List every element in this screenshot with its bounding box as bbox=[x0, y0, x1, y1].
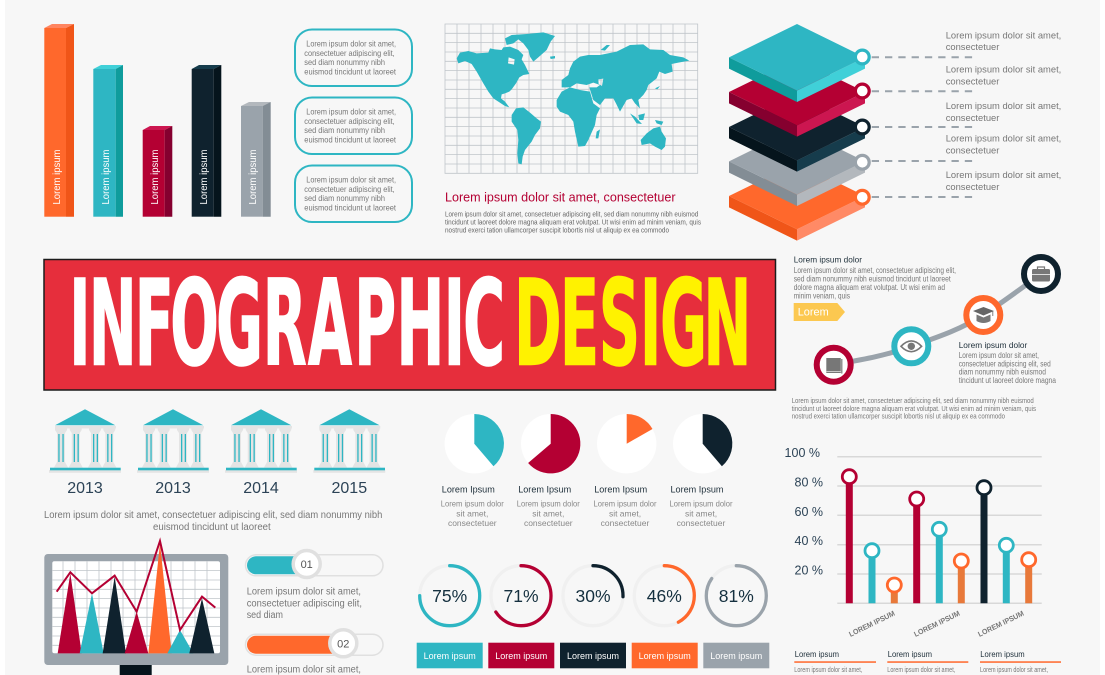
text box 2: consectetuer adipiscing elit, bbox=[304, 116, 395, 126]
x axis labels: LOREM IPSUM bbox=[912, 609, 961, 639]
lollipop bars bbox=[849, 477, 1029, 603]
footer column 3 bbox=[980, 649, 1061, 674]
text box 2: euismod tincidunt ut laoreet bbox=[304, 134, 397, 144]
temple 2014 bbox=[225, 409, 297, 473]
timeline bottom paragraph: nostrud exerci tation ullamcorper suscipit lobortis nisl ut aliquip ex ea commodo bbox=[792, 412, 1005, 420]
progress rings bbox=[420, 566, 766, 626]
timeline intro text: Lorem ipsum dolor bbox=[794, 255, 862, 265]
x axis labels bbox=[847, 609, 1025, 639]
pie 3: sit amet, bbox=[609, 508, 641, 518]
text box 1: euismod tincidunt ut laoreet bbox=[304, 66, 397, 76]
monitor frame bbox=[44, 554, 228, 665]
title text bbox=[69, 255, 751, 394]
button crimson: Lorem ipsum bbox=[495, 651, 547, 661]
node: eye bbox=[894, 329, 928, 363]
temple caption: Lorem ipsum dolor sit amet, consectetuer adipiscing elit, sed diam nonummy nibh bbox=[44, 510, 382, 521]
x axis labels: LOREM IPSUM bbox=[976, 609, 1025, 639]
slider 01 text: sed diam bbox=[247, 610, 283, 621]
pie 4: Lorem Ipsum bbox=[670, 484, 724, 495]
pie 4: consectetuer bbox=[677, 518, 726, 528]
button teal: Lorem ipsum bbox=[424, 651, 476, 661]
pie 2: Lorem ipsum dolor bbox=[517, 499, 580, 509]
peak chart bbox=[57, 541, 215, 653]
layer captions: Lorem ipsum dolor sit amet, bbox=[946, 101, 1061, 112]
3D bar chart bbox=[44, 24, 271, 217]
pie 2: consectetuer bbox=[524, 518, 573, 528]
bar: crimson: Lorem ipsum bbox=[150, 150, 161, 204]
node: book bbox=[817, 348, 851, 382]
footer column 1: Lorem ipsum dolor sit amet, bbox=[794, 667, 862, 674]
slider 01 text bbox=[247, 586, 362, 621]
title banner bbox=[44, 255, 776, 394]
pie 2: sit amet, bbox=[532, 508, 564, 518]
button crimson bbox=[488, 643, 554, 668]
pie 1 bbox=[441, 414, 504, 528]
timeline side text: diam nonummy nibh euismod bbox=[959, 368, 1046, 377]
button grey bbox=[703, 643, 769, 668]
bar: crimson bbox=[143, 126, 172, 217]
year labels: 2015 bbox=[332, 480, 367, 497]
ring 46%: 46% bbox=[647, 586, 682, 606]
isometric layer stack bbox=[729, 24, 1061, 241]
pie 3 bbox=[594, 414, 657, 528]
monitor screen bbox=[52, 561, 220, 653]
title text: DESIGN bbox=[514, 255, 751, 394]
layer captions: consectetuer bbox=[946, 42, 999, 53]
pie 2 bbox=[517, 414, 580, 528]
sliders bbox=[246, 550, 383, 675]
map paragraph bbox=[445, 210, 701, 235]
timeline intro text: sed diam nonummy nibh euismod tincidunt ut laoreet bbox=[794, 274, 951, 284]
rounded text boxes bbox=[295, 30, 412, 222]
y axis labels: 100 % bbox=[785, 446, 820, 460]
map grid bbox=[445, 24, 698, 173]
world map with grid bbox=[445, 24, 701, 235]
monitor stand bbox=[120, 665, 152, 675]
layer captions: Lorem ipsum dolor sit amet, bbox=[946, 170, 1061, 181]
button grey: Lorem ipsum bbox=[710, 651, 762, 661]
pie 3: Lorem Ipsum bbox=[594, 484, 647, 495]
year labels: 2014 bbox=[243, 480, 279, 497]
footer column 2: Lorem ipsum dolor sit amet, bbox=[887, 667, 955, 674]
bar: navy: Lorem ipsum bbox=[199, 150, 210, 204]
ring 71% bbox=[491, 566, 551, 626]
timeline side text bbox=[959, 340, 1056, 385]
text box 2: sed diam nonummy nibh bbox=[304, 125, 385, 135]
bar: teal: Lorem ipsum bbox=[101, 150, 112, 204]
footer column 1 bbox=[794, 649, 876, 674]
map heading: Lorem ipsum dolor sit amet, consectetuer bbox=[445, 190, 676, 204]
y axis labels: 20 % bbox=[794, 564, 823, 578]
slider 02: 02 bbox=[337, 638, 349, 650]
x axis labels: LOREM IPSUM bbox=[847, 609, 896, 639]
pie charts bbox=[441, 414, 733, 528]
button navy: Lorem ipsum bbox=[567, 651, 619, 661]
text box 1 bbox=[295, 30, 412, 86]
bar: navy bbox=[192, 65, 221, 217]
text box 2: Lorem ipsum dolor sit amet, bbox=[306, 106, 396, 116]
text box 1: Lorem ipsum dolor sit amet, bbox=[306, 38, 396, 48]
bar: grey: Lorem ipsum bbox=[248, 150, 259, 204]
lollipop chart bbox=[785, 446, 1061, 674]
ring 71%: 71% bbox=[503, 586, 539, 606]
timeline intro text: minim veniam, quis bbox=[794, 292, 850, 300]
pie 4: sit amet, bbox=[685, 508, 717, 518]
temple 2013 bbox=[49, 409, 121, 473]
layer captions: Lorem ipsum dolor sit amet, bbox=[946, 30, 1061, 41]
layer captions: Lorem ipsum dolor sit amet, bbox=[946, 64, 1061, 75]
ring 46% bbox=[634, 566, 694, 626]
layer captions: Lorem ipsum dolor sit amet, bbox=[946, 133, 1061, 144]
screen grid bbox=[52, 561, 220, 653]
connector dashes bbox=[872, 57, 974, 197]
pie 1: Lorem Ipsum bbox=[442, 484, 495, 495]
timeline side text: Lorem ipsum dolor bbox=[959, 340, 1027, 350]
yellow tag: Lorem bbox=[798, 306, 829, 318]
timeline panel bbox=[792, 255, 1058, 420]
temple year row bbox=[44, 409, 385, 533]
text box 3: consectetuer adipiscing elit, bbox=[304, 184, 395, 194]
footer column 1: Lorem ipsum bbox=[795, 649, 839, 659]
footer column 3: Lorem ipsum bbox=[980, 649, 1025, 659]
temple 2015 bbox=[313, 409, 385, 473]
timeline side text: tincidunt ut laoreet dolore magna bbox=[959, 376, 1056, 385]
timeline side text: consectetuer adipiscing elit, sed bbox=[959, 359, 1051, 368]
lollipop heads bbox=[842, 470, 1036, 592]
ring 30% bbox=[563, 566, 623, 626]
timeline curve bbox=[834, 274, 1041, 365]
continents bbox=[457, 32, 689, 164]
timeline intro text bbox=[794, 255, 956, 300]
pie 4: Lorem ipsum dolor bbox=[670, 499, 733, 509]
footer column 2: Lorem ipsum bbox=[888, 649, 932, 659]
footer column 3: Lorem ipsum dolor sit amet, bbox=[980, 667, 1048, 674]
text box 3: sed diam nonummy nibh bbox=[304, 193, 385, 203]
ring 75%: 75% bbox=[432, 586, 467, 606]
temple caption: euismod tincidunt ut laoreet bbox=[153, 522, 271, 533]
y axis labels bbox=[785, 446, 823, 578]
layer captions: consectetuer bbox=[946, 145, 999, 156]
button orange bbox=[632, 643, 698, 668]
bar: teal bbox=[93, 65, 123, 217]
button teal bbox=[417, 643, 483, 668]
slider 01: 01 bbox=[301, 559, 313, 571]
year labels bbox=[67, 480, 367, 497]
footer column 2 bbox=[887, 649, 968, 674]
timeline bottom paragraph: tincidunt ut laoreet dolore magna aliquam erat volutpat. Ut wisi enim ad minim veniam, quis bbox=[792, 404, 1036, 413]
y axis labels: 60 % bbox=[794, 505, 823, 519]
timeline bottom paragraph: Lorem ipsum dolor sit amet, consectetuer adipiscing elit, sed diam nonummy nibh euismod bbox=[792, 396, 1034, 405]
text box 2 bbox=[295, 98, 412, 154]
text box 3: Lorem ipsum dolor sit amet, bbox=[306, 174, 396, 184]
bar: orange bbox=[44, 24, 74, 217]
button navy bbox=[560, 643, 626, 668]
layer captions: consectetuer bbox=[946, 113, 999, 124]
y axis labels: 80 % bbox=[794, 476, 823, 490]
temple caption bbox=[44, 510, 382, 533]
chart gridlines bbox=[837, 457, 1042, 603]
map paragraph: nostrud exerci tation ullamcorper suscipit lobortis nisl ut aliquip ex ea commodo bbox=[445, 226, 669, 235]
bar: orange: Lorem ipsum bbox=[52, 150, 63, 204]
ring 81%: 81% bbox=[719, 586, 754, 606]
text box 1: consectetuer adipiscing elit, bbox=[304, 48, 395, 58]
ring 75% bbox=[420, 566, 480, 626]
pie 1: sit amet, bbox=[456, 508, 488, 518]
pie 3: consectetuer bbox=[601, 518, 650, 528]
pie 2: Lorem Ipsum bbox=[518, 484, 571, 495]
timeline bottom paragraph bbox=[792, 396, 1036, 420]
layer captions: consectetuer bbox=[946, 76, 999, 87]
ring 81% bbox=[706, 566, 766, 626]
map paragraph: Lorem ipsum dolor sit amet, consectetuer adipiscing elit, sed diam nonummy nibh euismod bbox=[445, 210, 698, 218]
button orange: Lorem ipsum bbox=[639, 651, 691, 661]
pie 1: consectetuer bbox=[448, 518, 497, 528]
slider 01 text: consectetuer adipiscing elit, bbox=[247, 598, 362, 609]
ring legend buttons bbox=[417, 643, 769, 668]
node: graduation cap bbox=[966, 298, 1000, 332]
node: briefcase bbox=[1024, 257, 1058, 291]
slider 01 text: Lorem ipsum dolor sit amet, bbox=[247, 586, 361, 597]
layer markers bbox=[855, 50, 869, 204]
year labels: 2013 bbox=[67, 480, 103, 497]
layer captions bbox=[946, 30, 1061, 193]
timeline intro text: dolore magna aliquam erat volutpat. Ut wisi enim ad bbox=[794, 283, 945, 292]
timeline side text: Lorem ipsum dolor sit amet, bbox=[959, 351, 1039, 360]
temple 2013 second bbox=[137, 409, 209, 473]
pie 1: Lorem ipsum dolor bbox=[441, 499, 504, 509]
stack shapes bbox=[729, 24, 865, 241]
bar: grey bbox=[241, 102, 271, 217]
text box 1: sed diam nonummy nibh bbox=[304, 57, 385, 67]
title text: INFOGRAPHIC bbox=[69, 255, 505, 394]
pie 4 bbox=[670, 414, 733, 528]
year labels: 2013 bbox=[155, 480, 191, 497]
pie 3: Lorem ipsum dolor bbox=[594, 499, 657, 509]
monitor chart bbox=[44, 541, 228, 675]
y axis labels: 40 % bbox=[794, 534, 823, 548]
yellow tag bbox=[794, 303, 845, 321]
text box 3: euismod tincidunt ut laoreet bbox=[304, 202, 397, 212]
timeline intro text: Lorem ipsum dolor sit amet, consectetuer adipiscing elit, bbox=[794, 266, 956, 275]
ring 30%: 30% bbox=[575, 586, 611, 606]
layer captions: consectetuer bbox=[946, 182, 999, 193]
banner background bbox=[44, 260, 776, 390]
map paragraph: tincidunt ut laoreet dolore magna aliquam erat volutpat. Ut wisi enim ad minim veniam, quis bbox=[445, 218, 701, 227]
text box 3 bbox=[295, 166, 412, 222]
